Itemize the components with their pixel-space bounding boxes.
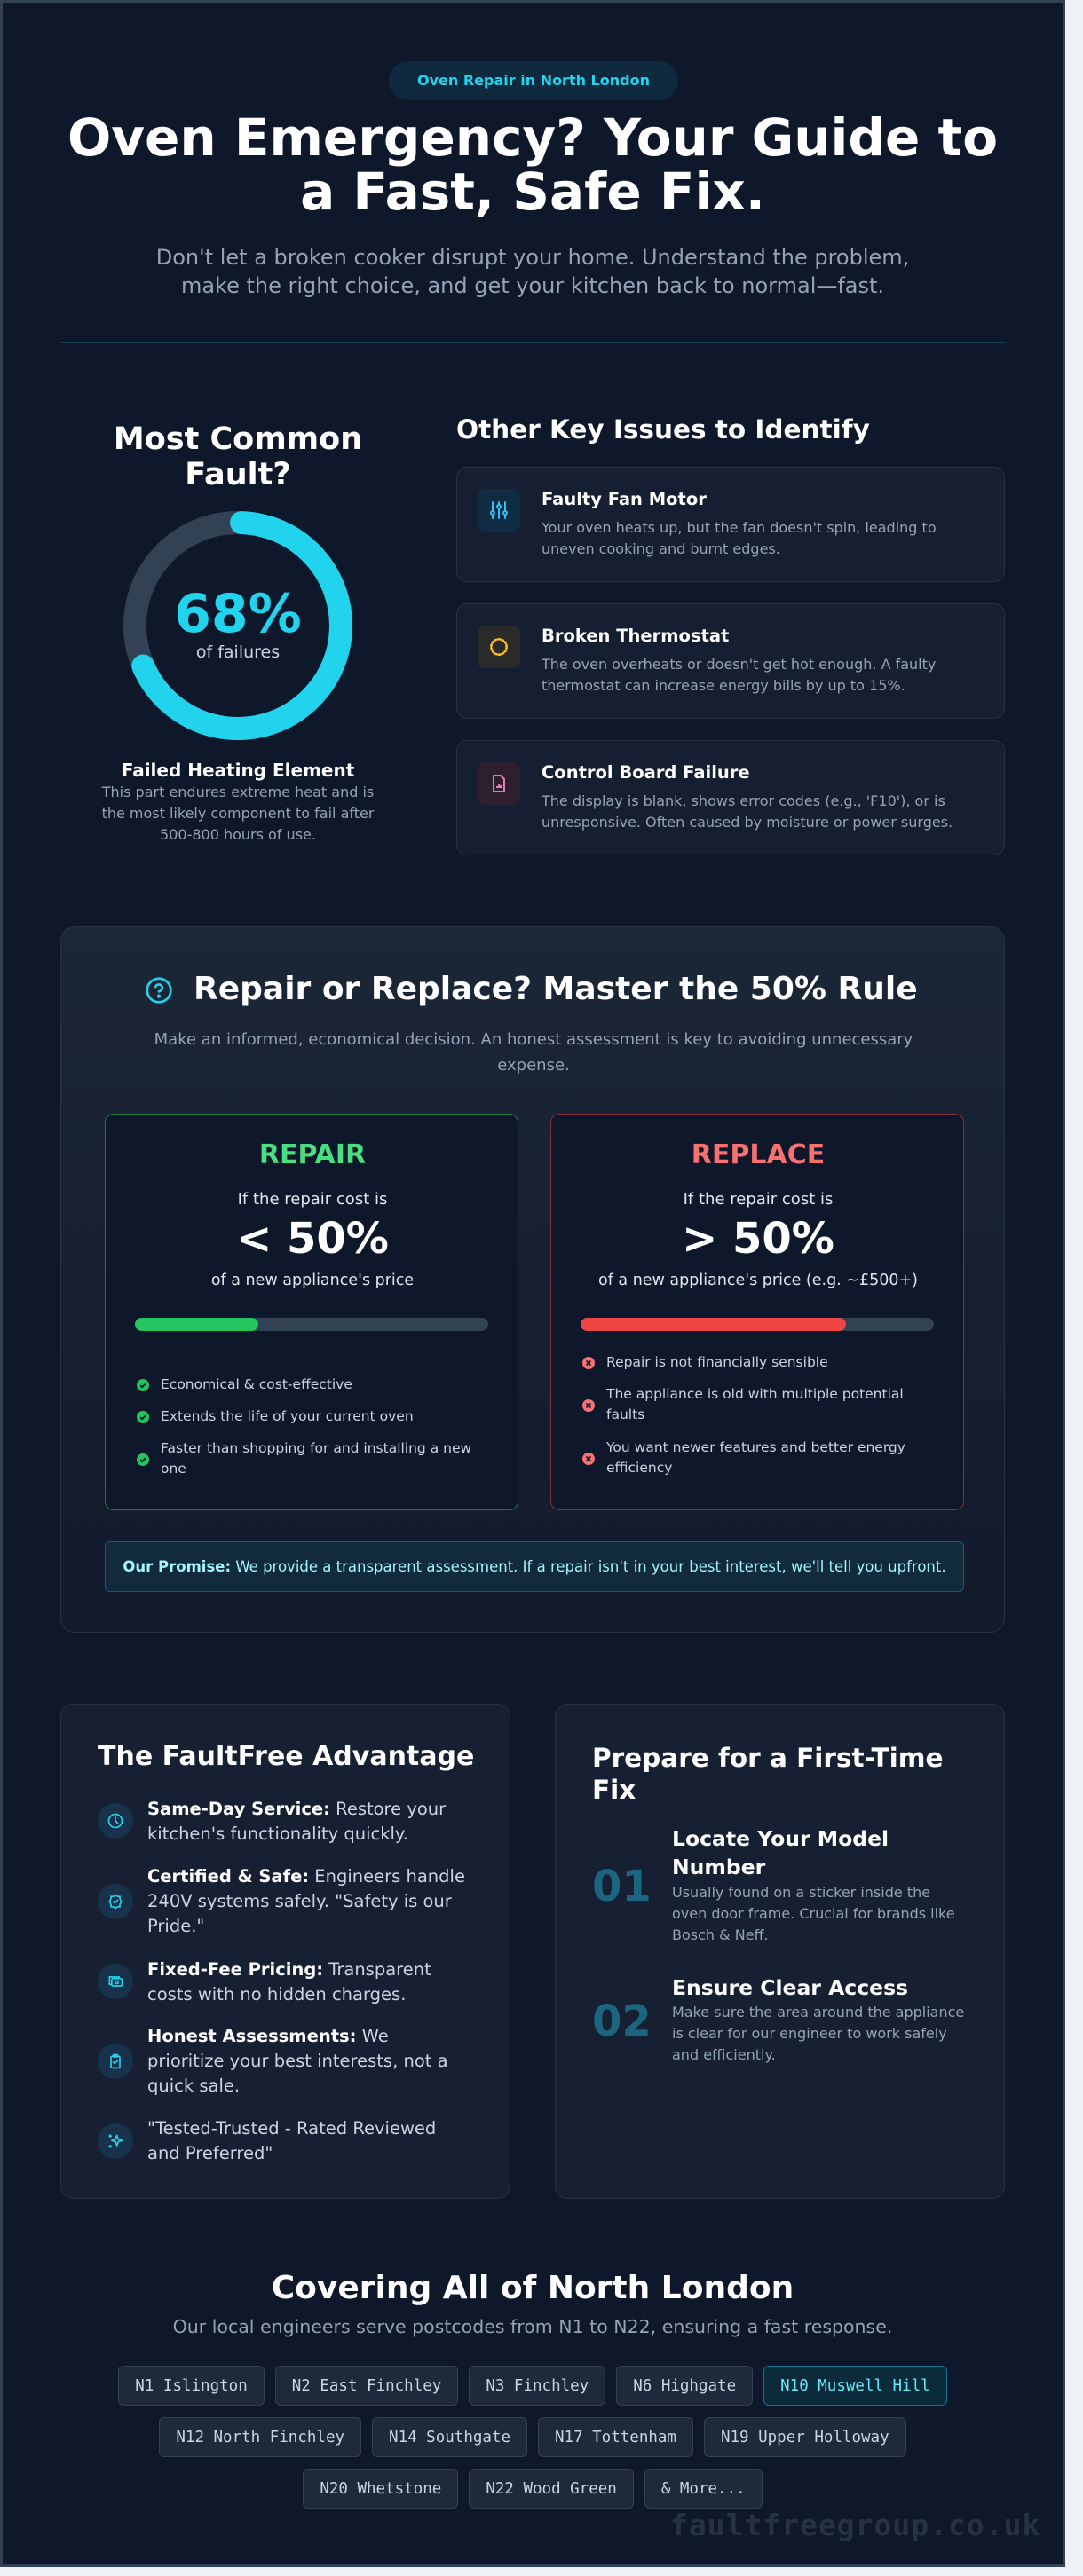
panel: most common fault [101, 421, 375, 843]
card: faulty fan motor: Your oven heats up, but the fan doesn't spin, leading to [542, 519, 937, 536]
item: same-day: kitchen's functionality quickly. [147, 1824, 408, 1844]
card: replace: of a new appliance's price (e.g. ~£500+) [598, 1272, 918, 1289]
step 01: oven door frame. Crucial for brands like [672, 1905, 955, 1922]
heading: advantage: The FaultFree Advantage [98, 1741, 474, 1772]
card: control board failure [456, 740, 1005, 855]
icon: question [146, 977, 172, 1004]
donut chart [123, 511, 352, 740]
item: fixed fee [98, 1959, 431, 2005]
card: repair: REPAIR [259, 1139, 366, 1170]
panel: faultfree advantage: Pride." [147, 1916, 204, 1936]
card: repair [105, 1114, 518, 1510]
item: honest: prioritize your best interests, not a [147, 2051, 448, 2071]
subtitle: Don't let a broken cooker disrupt your home. Understand the problem, [156, 245, 909, 270]
card: repair: of a new appliance's price [211, 1272, 414, 1289]
text: intro: expense. [497, 1056, 570, 1075]
step 02: 02 [592, 1997, 652, 2046]
icon: loader [478, 626, 520, 668]
card: control board failure: Control Board Failure [542, 762, 750, 783]
card: control board failure: unresponsive. Often caused by moisture or power surges. [542, 814, 953, 831]
step 01: Locate Your Model [672, 1826, 889, 1851]
bar: replace [581, 1318, 934, 1331]
label: failed heating element: the most likely component to fail after [102, 805, 374, 822]
item: tested trusted: "Tested-Trusted - Rated Reviewed [147, 2118, 436, 2139]
list: repair pros: one [161, 1461, 186, 1477]
item: fixed fee: Fixed-Fee Pricing: Transparent [147, 1959, 431, 1980]
icon: document chart [478, 762, 520, 805]
heading: repair or replace: Repair or Replace? Master the 50% Rule [194, 971, 918, 1007]
heading: other key issues: Other Key Issues to Identify [456, 414, 870, 445]
list: replace reasons: The appliance is old with multiple potential [606, 1386, 904, 1402]
list: repair pros: Extends the life of your current oven [161, 1408, 414, 1424]
postcode tags: N14 Southgate [389, 2428, 510, 2446]
postcode tags: N12 North Finchley [176, 2428, 344, 2446]
panel: prepare for first-time fix [555, 1704, 1005, 2199]
postcode tags: N20 Whetstone [320, 2479, 441, 2497]
item: same-day: Same-Day Service: Restore your [147, 1799, 446, 1819]
list: repair pros [137, 1376, 471, 1477]
text: postcodes intro: Our local engineers serve postcodes from N1 to N22, ensuring a fast response. [173, 2316, 892, 2337]
item: fixed fee: costs with no hidden charges. [147, 1984, 406, 2005]
callout: our promise [105, 1541, 964, 1592]
step 01 [592, 1826, 955, 1943]
postcode tags: & More... [661, 2479, 746, 2497]
card: replace [550, 1114, 964, 1510]
postcode tags: N10 Muswell Hill [780, 2376, 930, 2394]
list: repair pros: Economical & cost-effective [161, 1376, 352, 1392]
card: broken thermostat: The oven overheats or doesn't get hot enough. A faulty [542, 656, 936, 673]
card: control board failure: The display is blank, shows error codes (e.g., 'F10'), or is [542, 792, 945, 809]
watermark: faultfreegroup.co.uk [670, 2508, 1040, 2542]
step 01: Number [672, 1855, 765, 1879]
label: failed heating element [101, 760, 375, 843]
badge: Oven Repair in North London [417, 72, 650, 89]
list: replace reasons: You want newer features and better energy [606, 1439, 905, 1455]
label: failed heating element: Failed Heating Element [122, 760, 354, 781]
panel: faultfree advantage [60, 1704, 510, 2199]
heading: prepare: Prepare for a First-Time [592, 1743, 943, 1773]
step 02: and efficiently. [672, 2046, 776, 2063]
postcode tags [118, 2366, 947, 2509]
subtitle: make the right choice, and get your kitchen back to normal—fast. [181, 273, 884, 298]
postcode tags: N22 Wood Green [486, 2479, 617, 2497]
item: same-day [98, 1799, 446, 1844]
postcode tags: N17 Tottenham [555, 2428, 676, 2446]
donut chart: of failures [196, 642, 280, 662]
heading: most common fault: Most Common [114, 421, 362, 457]
card: replace: If the repair cost is [684, 1190, 833, 1209]
step 01: 01 [592, 1862, 652, 1911]
donut chart: 68% [174, 583, 302, 645]
card: replace: REPLACE [692, 1139, 825, 1170]
postcode tags: N19 Upper Holloway [721, 2428, 889, 2446]
panel: faultfree advantage: Certified & Safe: Engineers handle [147, 1866, 465, 1887]
card: faulty fan motor: Faulty Fan Motor [542, 489, 707, 509]
title: Oven Emergency? Your Guide to [67, 107, 998, 168]
panel: repair or replace [60, 926, 1005, 1633]
card: replace: > 50% [682, 1214, 834, 1264]
card: faulty fan motor [456, 467, 1005, 582]
step 02: Make sure the area around the appliance [672, 2004, 964, 2021]
icon: sliders [478, 489, 520, 532]
title [67, 107, 998, 222]
postcode tags: N1 Islington [135, 2376, 248, 2394]
bar: repair [135, 1318, 488, 1331]
step 02: Ensure Clear Access [672, 1975, 908, 2000]
card: faulty fan motor: uneven cooking and burnt edges. [542, 540, 780, 557]
card: broken thermostat: thermostat can increase energy bills by up to 15%. [542, 677, 905, 694]
heading: prepare [592, 1743, 943, 1805]
heading: prepare: Fix [592, 1775, 636, 1805]
text: intro [154, 1030, 913, 1075]
list: replace reasons: efficiency [606, 1460, 672, 1476]
badge [389, 61, 678, 100]
card: broken thermostat: Broken Thermostat [542, 626, 729, 646]
label: failed heating element: This part endures extreme heat and is [102, 784, 374, 800]
item: tested trusted: and Preferred" [147, 2143, 273, 2163]
postcode tags: N2 East Finchley [292, 2376, 441, 2394]
step 02: is clear for our engineer to work safely [672, 2025, 947, 2042]
step 01: Bosch & Neff. [672, 1926, 769, 1943]
item: tested trusted [98, 2118, 436, 2163]
callout: our promise: Our Promise: We provide a transparent assessment. If a repair isn't in your best interest, we'll tell you upfront. [123, 1558, 946, 1575]
list: replace reasons: Repair is not financially sensible [606, 1354, 828, 1370]
list: replace reasons: faults [606, 1406, 644, 1422]
step 02 [592, 1975, 964, 2063]
title: a Fast, Safe Fix. [300, 161, 765, 222]
panel: faultfree advantage: quick sale. [147, 2076, 240, 2096]
heading: most common fault [114, 421, 362, 492]
subtitle [156, 245, 909, 298]
text: intro: Make an informed, economical decision. An honest assessment is key to avoiding unnecessary [154, 1030, 913, 1049]
item: honest [98, 2026, 448, 2096]
step 01: Usually found on a sticker inside the [672, 1884, 930, 1901]
card: repair: < 50% [236, 1214, 389, 1264]
item: certified: 240V systems safely. "Safety is our [147, 1891, 452, 1911]
heading: most common fault: Fault? [185, 457, 291, 492]
list: repair pros: Faster than shopping for and installing a new [161, 1440, 471, 1456]
panel: faultfree advantage: Honest Assessments: We [147, 2026, 389, 2046]
card: broken thermostat [456, 603, 1005, 719]
heading: covering north london: Covering All of North London [272, 2270, 794, 2306]
postcode tags: N3 Finchley [486, 2376, 589, 2394]
list: replace reasons [582, 1354, 905, 1476]
label: failed heating element: 500-800 hours of use. [160, 826, 316, 843]
item: certified [98, 1866, 465, 1936]
card: repair: If the repair cost is [238, 1190, 387, 1209]
postcode tags: N6 Highgate [633, 2376, 736, 2394]
